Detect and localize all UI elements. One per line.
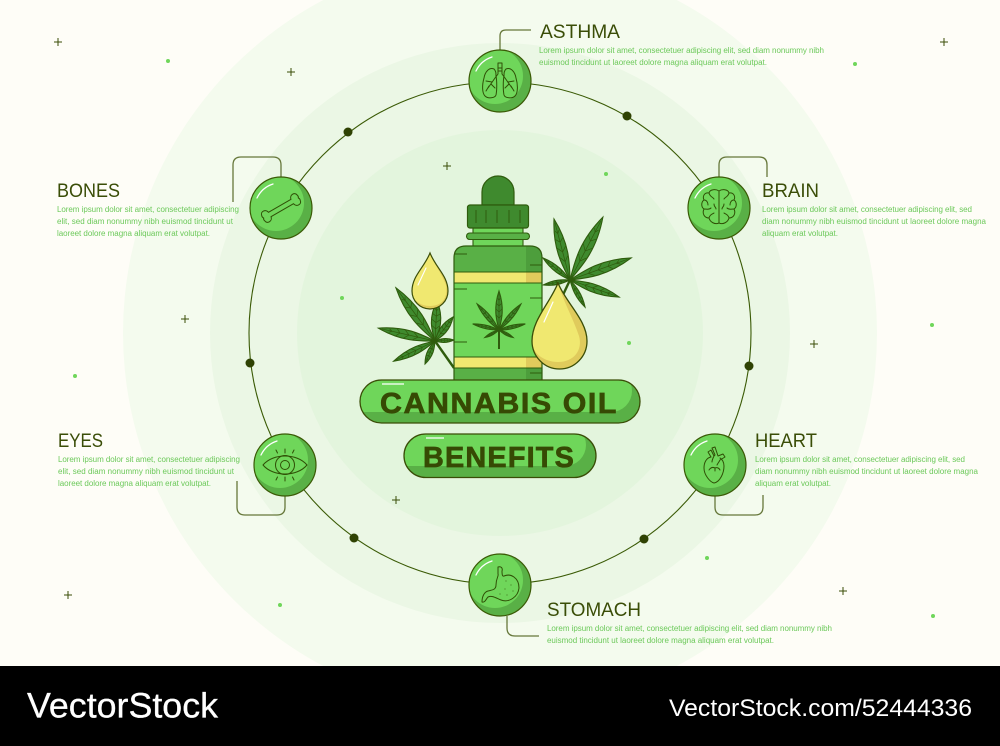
heading: BONES bbox=[57, 181, 120, 202]
description: diam nonummy nibh euismod tincidunt ut laoreet dolore magna bbox=[762, 217, 987, 226]
icon: brain bbox=[686, 175, 750, 239]
dropper bulb bbox=[482, 176, 514, 205]
icon: bone bbox=[248, 175, 312, 239]
small oil drop bbox=[412, 253, 448, 309]
description bbox=[547, 624, 832, 645]
description: euismod tincidunt ut laoreet dolore magna aliquam erat volutpat. bbox=[539, 58, 767, 67]
connector bbox=[237, 481, 285, 515]
footer image id: VectorStock.com/52444336 bbox=[669, 695, 972, 722]
description: euismod tincidunt ut laoreet dolore magna aliquam erat volutpat. bbox=[547, 636, 774, 645]
connector bbox=[719, 157, 767, 177]
decorative plus signs and dots bbox=[54, 38, 948, 618]
description bbox=[539, 46, 824, 67]
large oil drop bbox=[532, 283, 587, 369]
heading: HEART bbox=[755, 431, 817, 452]
right cannabis leaf bbox=[541, 215, 633, 308]
heading: STOMACH bbox=[547, 600, 641, 621]
footer bar bbox=[0, 666, 1000, 746]
panel: stomach bbox=[467, 552, 832, 645]
description: aliquam erat volutpat. bbox=[755, 479, 831, 488]
icon: stomach bbox=[467, 552, 531, 616]
title banner: cannabis oil: CANNABIS OIL bbox=[380, 388, 618, 420]
description bbox=[57, 205, 239, 238]
dropper bottle bbox=[454, 176, 542, 381]
body bbox=[454, 246, 542, 381]
concentric background circles bbox=[123, 0, 877, 710]
cap bbox=[468, 205, 528, 228]
description: diam nonummy nibh euismod tincidunt ut laoreet dolore magna bbox=[755, 467, 979, 476]
heading: EYES bbox=[58, 431, 103, 452]
heading: BRAIN bbox=[762, 181, 819, 202]
connector bbox=[233, 157, 281, 202]
description bbox=[762, 205, 987, 238]
description: Lorem ipsum dolor sit amet, consectetuer adipiscing elit, sed bbox=[762, 205, 972, 214]
connector bbox=[507, 616, 539, 636]
title banner: cannabis oil bbox=[359, 379, 641, 424]
panel: eyes bbox=[58, 431, 316, 515]
title banner: benefits bbox=[403, 433, 597, 478]
panel: asthma bbox=[467, 22, 824, 112]
description bbox=[755, 455, 979, 488]
description: elit, sed diam nonummy nibh euismod tincidunt ut bbox=[57, 217, 234, 226]
collar ring bbox=[466, 233, 530, 240]
panel: heart bbox=[682, 431, 979, 515]
icon: lungs bbox=[467, 48, 531, 112]
neck bbox=[473, 228, 523, 247]
panel: brain bbox=[686, 157, 987, 239]
icon: heart bbox=[682, 432, 746, 496]
connector bbox=[715, 495, 763, 515]
description: laoreet dolore magna aliquam erat volutpat. bbox=[58, 479, 211, 488]
description: laoreet dolore magna aliquam erat volutpat. bbox=[57, 229, 210, 238]
description: aliquam erat volutpat. bbox=[762, 229, 838, 238]
title banner: benefits: BENEFITS bbox=[423, 442, 575, 474]
bottle leaf bbox=[472, 291, 526, 349]
footer logo: VectorStock bbox=[27, 686, 219, 726]
description: Lorem ipsum dolor sit amet, consectetuer adipiscing bbox=[57, 205, 239, 214]
description: Lorem ipsum dolor sit amet, consectetuer adipiscing bbox=[58, 455, 240, 464]
icon: eye bbox=[252, 432, 316, 496]
left cannabis leaf bbox=[377, 285, 456, 368]
yellow label bands bbox=[454, 272, 542, 368]
description: elit, sed diam nonummy nibh euismod tincidunt ut bbox=[58, 467, 235, 476]
connector bbox=[500, 30, 531, 50]
description: Lorem ipsum dolor sit amet, consectetuer adipiscing elit, sed diam nonummy nibh bbox=[539, 46, 824, 55]
description: Lorem ipsum dolor sit amet, consectetuer adipiscing elit, sed bbox=[755, 455, 965, 464]
panel: bones bbox=[57, 157, 312, 239]
orbit ring with dots bbox=[246, 82, 754, 584]
description bbox=[58, 455, 240, 488]
description: Lorem ipsum dolor sit amet, consectetuer adipiscing elit, sed diam nonummy nibh bbox=[547, 624, 832, 633]
heading: ASTHMA bbox=[540, 22, 620, 43]
